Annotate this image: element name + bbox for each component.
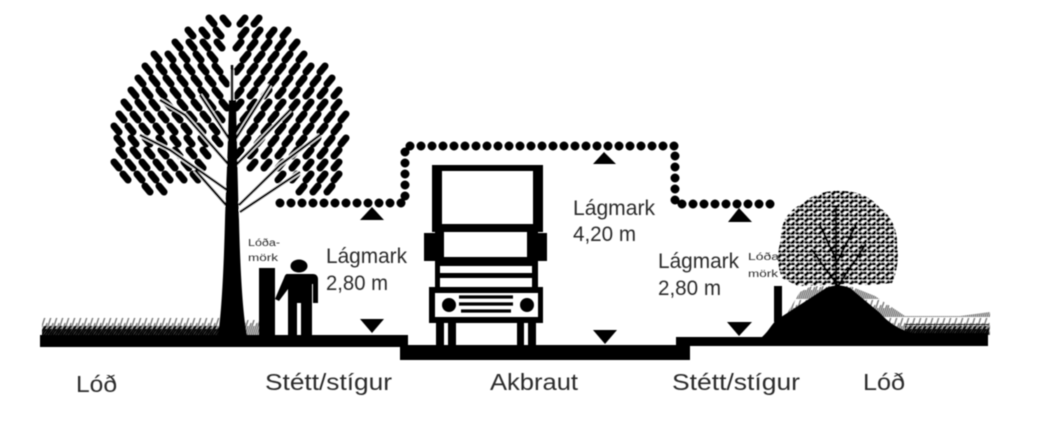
truck cargo box	[432, 165, 543, 232]
label: plot left: Lóð	[76, 371, 117, 397]
label: sidewalk left: Stétt/stígur	[265, 369, 392, 395]
ground profile: plots, sidewalks and road	[40, 286, 988, 360]
truck mirrors	[424, 233, 547, 261]
grass: right plot slope	[783, 286, 990, 335]
label: road clearance: Lágmark	[573, 197, 656, 220]
tree trunk and branches	[140, 65, 320, 336]
truck headlights	[442, 298, 534, 312]
label: sidewalk clearance left: 2,80 m	[326, 272, 388, 295]
label: sidewalk clearance right: Lágmark	[658, 250, 739, 273]
label: sidewalk clearance right: 2,80 m	[658, 277, 721, 300]
label: road: Akbraut	[490, 369, 579, 395]
tree leaves	[114, 18, 346, 192]
truck bumper and hood	[429, 287, 543, 323]
label: road clearance: 4,20 m	[573, 223, 636, 246]
truck front view	[424, 165, 547, 346]
label: sidewalk right: Stétt/stígur	[672, 369, 800, 395]
grass: left plot	[42, 317, 259, 336]
truck wheels	[436, 323, 536, 346]
clearance arrow markers	[360, 152, 752, 344]
label: sidewalk clearance left: Lágmark	[326, 245, 407, 268]
icon: pedestrian	[275, 260, 318, 336]
truck cab	[435, 224, 538, 292]
label: boundary left: Lóða-	[248, 237, 280, 249]
truck grille	[459, 297, 513, 311]
small tree crown	[775, 187, 900, 287]
label: boundary left: mörk	[248, 253, 279, 264]
property post: right	[774, 286, 782, 322]
small tree on mound	[775, 187, 900, 287]
label: boundary right: mörk	[748, 269, 779, 280]
large tree	[114, 18, 346, 336]
label: plot right: Lóð	[863, 369, 905, 395]
property post: left	[259, 268, 275, 336]
clearance envelope dotted line	[280, 146, 775, 204]
tree branch gaps	[140, 70, 320, 212]
small tree trunk and branches	[812, 205, 866, 286]
label: boundary right: Lóða	[748, 251, 780, 263]
